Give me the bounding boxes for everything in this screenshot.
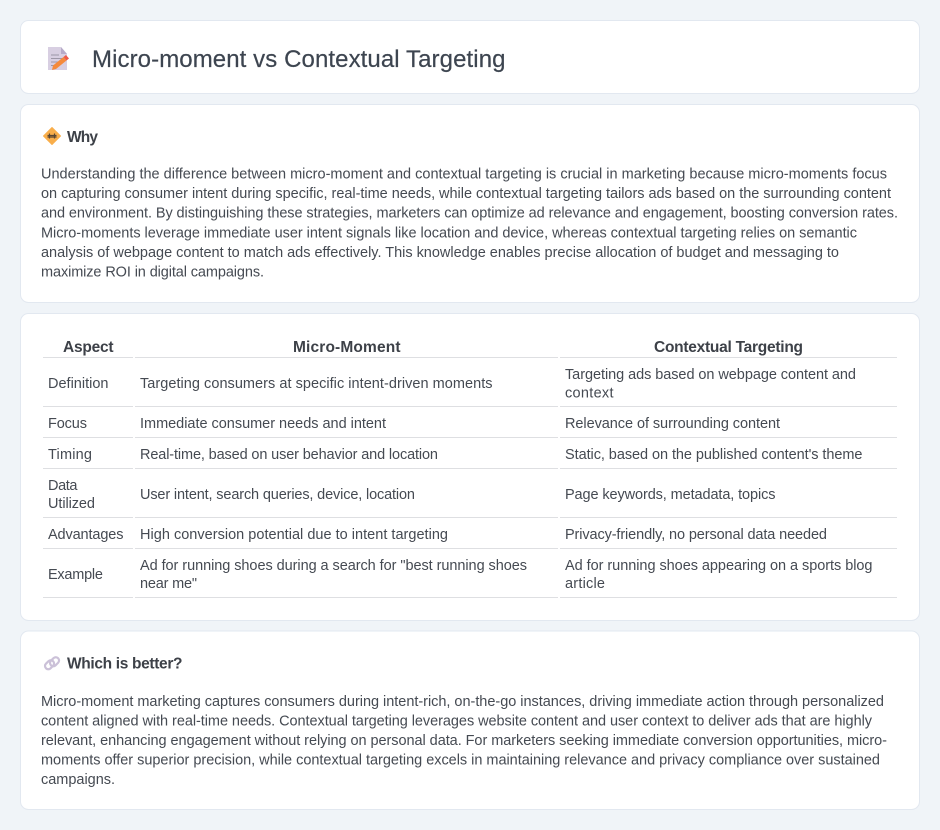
text block: why paragraph: Micro-moments leverage immediate user intent signals like location and device, whereas contextual targeting relies on semantic [41, 225, 857, 241]
text block: why paragraph: on capturing consumer intent during specific, real-time needs, while contextual targeting tailors ads based on the surrounding content [41, 186, 891, 202]
table row: timing: Timing [48, 447, 92, 463]
table row: example: near me" [140, 576, 197, 592]
panel: which is better [20, 631, 920, 810]
table row: data utilized [48, 478, 776, 512]
text block: which is better paragraph: Micro-moment marketing captures consumers during intent-rich, on-the-go instances, driving immediate action through personalized [41, 694, 884, 710]
table row: timing: Real-time, based on user behavior and location [140, 447, 438, 463]
table row: data utilized: Utilized [48, 496, 95, 512]
table row: focus: Relevance of surrounding content [565, 416, 780, 432]
text block: which is better paragraph: moments offer superior precision, while contextual targeting excels in maintaining relevance and privacy compliance over sustained [41, 752, 880, 768]
table row: example: Example [48, 567, 103, 583]
table row: focus [48, 416, 780, 432]
table row: advantages: Privacy-friendly, no personal data needed [565, 527, 827, 543]
panel: comparison table [20, 314, 920, 620]
table row: advantages: Advantages [48, 527, 124, 543]
table header row: Contextual Targeting [654, 339, 803, 356]
heading: which is better: Which is better? [67, 656, 182, 672]
table row: timing: Static, based on the published content's theme [565, 447, 862, 463]
table header row: Micro-Moment [293, 339, 400, 356]
table row: definition: Definition [48, 376, 108, 392]
text block: why paragraph: Understanding the difference between micro-moment and contextual targeting is crucial in marketing because micro-moments focus [41, 166, 887, 182]
table row: focus: Focus [48, 416, 87, 432]
text block: why paragraph [41, 166, 898, 280]
table row: example: Ad for running shoes appearing on a sports blog [565, 558, 872, 574]
panel: why [20, 104, 920, 302]
icon: chain link [44, 656, 60, 671]
table row: example: article [565, 576, 605, 592]
icon: diamond warning sign [44, 128, 60, 144]
table row: focus: Immediate consumer needs and intent [140, 416, 386, 432]
text block: why paragraph: and environment. By distinguishing these strategies, marketers can optimize ad relevance and engagement, boosting conversion rates. [41, 206, 898, 222]
table row: data utilized: Data [48, 478, 78, 494]
table row: definition: Targeting ads based on webpage content and [565, 367, 856, 383]
table row: timing [48, 447, 862, 463]
table row: example [48, 558, 872, 592]
table row: data utilized: User intent, search queries, device, location [140, 487, 415, 503]
table row: data utilized: Page keywords, metadata, topics [565, 487, 776, 503]
text block: why paragraph: analysis of webpage content to match ads effectively. This knowledge enables precise allocation of budget and messaging to [41, 245, 839, 261]
table row: definition: context [565, 386, 614, 402]
text block: why paragraph: maximize ROI in digital campaigns. [41, 264, 264, 280]
table row: advantages: High conversion potential due to intent targeting [140, 527, 448, 543]
icon: memo with pencil [48, 47, 69, 70]
panel: title header [20, 20, 920, 94]
table row: definition: Targeting consumers at specific intent-driven moments [140, 376, 492, 392]
title: Micro-moment vs Contextual Targeting [92, 46, 506, 73]
table row: example: Ad for running shoes during a search for "best running shoes [140, 558, 527, 574]
heading: why: Why [67, 129, 98, 146]
text block: which is better paragraph: content aligned with real-time needs. Contextual targeting leverages website content and user context to deliver ads that are highly [41, 714, 873, 730]
table header row: Aspect [63, 339, 114, 356]
text block: which is better paragraph [41, 694, 887, 788]
table row: definition [48, 367, 856, 402]
table row: advantages [48, 527, 827, 543]
text block: which is better paragraph: relevant, enhancing engagement without relying on personal data. For marketers seeking immediate conversion opportunities, micro- [41, 733, 887, 749]
table header row [63, 339, 803, 356]
text block: which is better paragraph: campaigns. [41, 772, 115, 788]
